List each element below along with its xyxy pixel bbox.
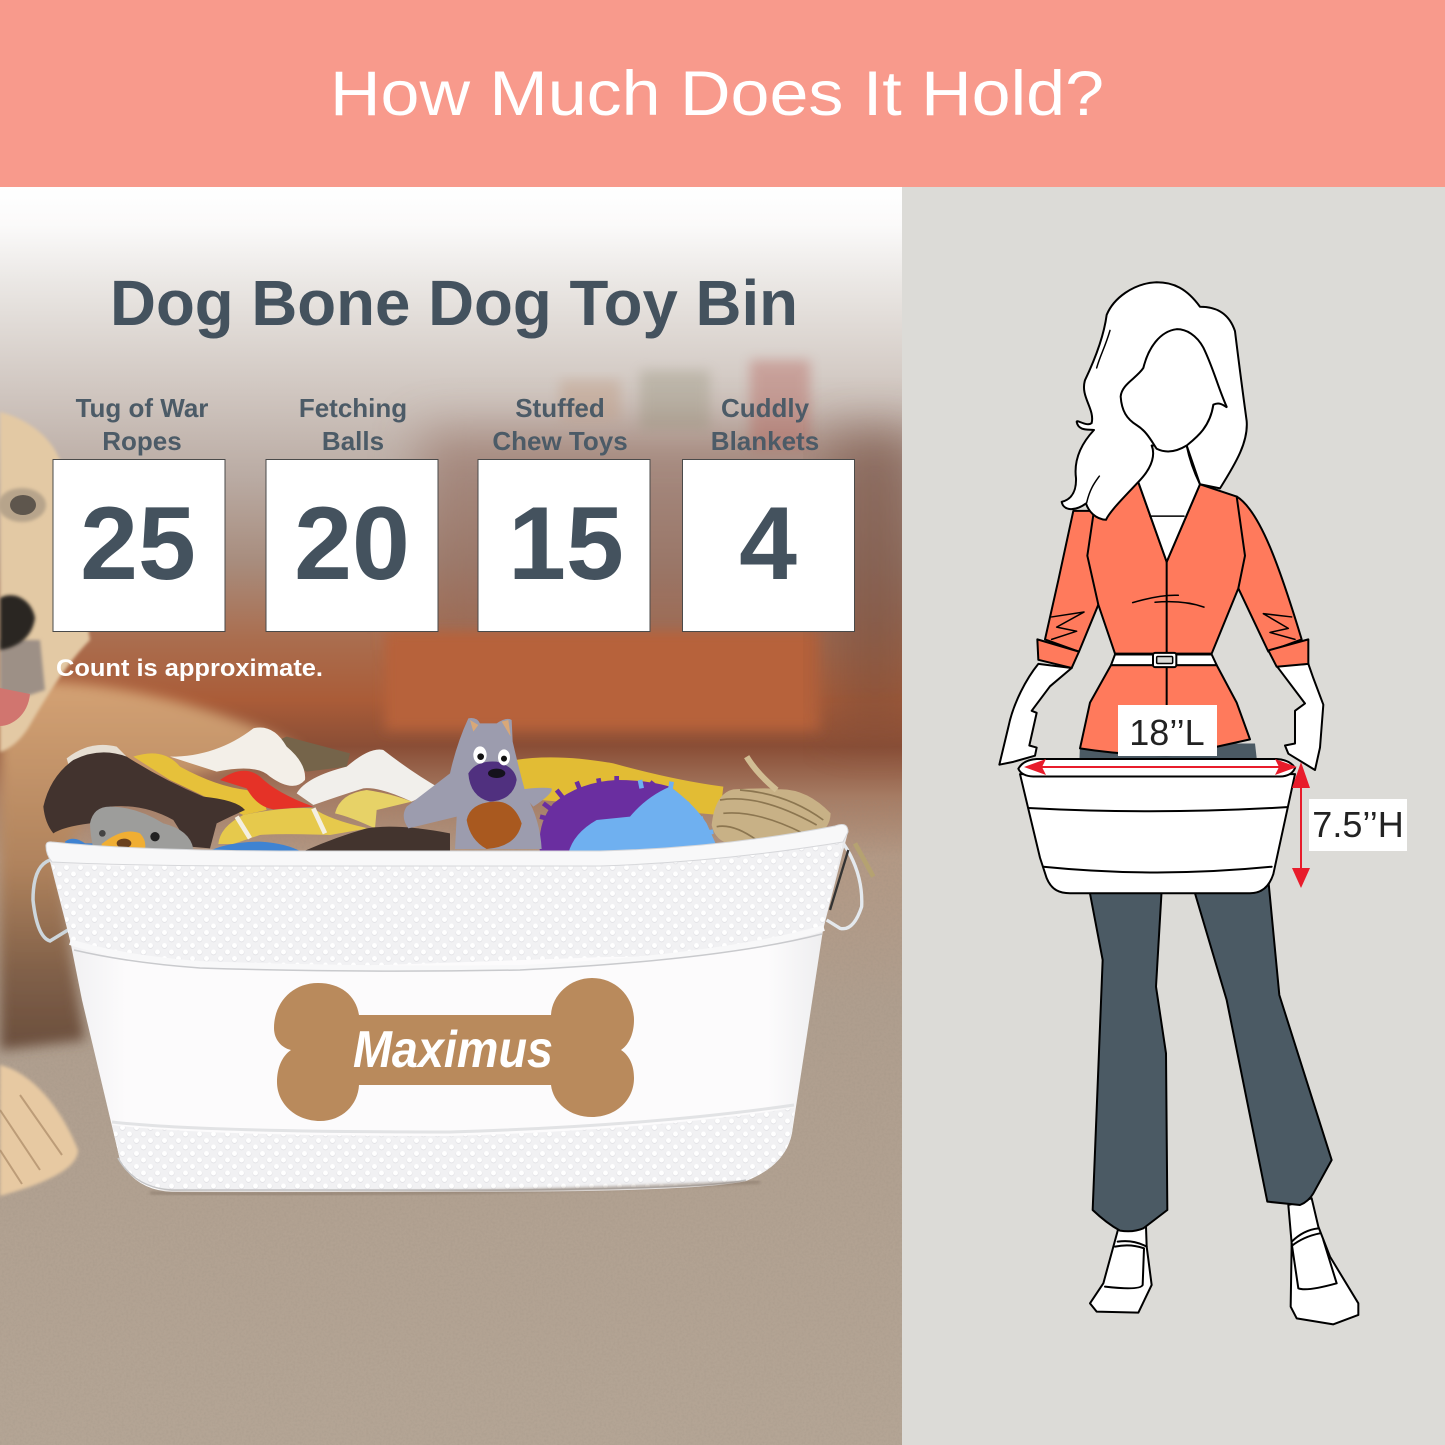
white cloth behind	[66, 744, 127, 764]
ribs	[70, 928, 824, 968]
left leg	[1089, 890, 1167, 1231]
left shoe	[1090, 1227, 1152, 1313]
brown plush 2	[305, 827, 450, 851]
right forearm and hand	[1277, 664, 1323, 770]
left handle	[33, 860, 68, 941]
label: Ropes	[102, 426, 182, 456]
right cuff	[1268, 639, 1308, 667]
arrow: length	[1024, 759, 1297, 775]
yellow toy	[515, 757, 723, 815]
hammered lower band	[112, 1108, 794, 1190]
grey bird plush	[90, 807, 193, 849]
upper body	[999, 282, 1323, 893]
squirrel plush	[404, 718, 552, 849]
left sleeve	[1045, 511, 1098, 652]
stat: cuddly blankets	[682, 393, 854, 632]
right handle bracket	[830, 850, 848, 910]
shirt placket	[1166, 562, 1168, 707]
toys	[43, 718, 873, 929]
shirt wrinkles	[1052, 595, 1295, 639]
value: 20	[294, 486, 410, 602]
value box	[266, 460, 438, 632]
right panel background	[902, 187, 1445, 1445]
label: Fetching	[299, 393, 407, 423]
label: Cuddly	[721, 393, 810, 423]
panel: woman holding tub	[999, 282, 1407, 1324]
value box	[682, 460, 854, 632]
hammered upper band	[52, 842, 843, 968]
dog head	[0, 412, 90, 752]
belt	[1111, 654, 1217, 665]
face	[1121, 329, 1227, 452]
yellow blanket	[218, 808, 368, 844]
toys: left pile	[43, 727, 450, 852]
pants waist	[1079, 743, 1257, 764]
hair strands	[1087, 330, 1110, 503]
tub body	[1020, 774, 1295, 893]
peplum	[1080, 665, 1250, 755]
tub body	[46, 824, 848, 1192]
belt buckle	[1153, 653, 1176, 667]
label: Stuffed	[515, 393, 605, 423]
bone toy	[170, 727, 305, 786]
white tub	[46, 824, 848, 1192]
brown plush	[43, 752, 245, 848]
yellow band	[133, 753, 267, 815]
room background	[0, 187, 920, 1445]
rim	[46, 824, 848, 866]
dog nose	[0, 595, 35, 650]
dark fabric	[282, 736, 350, 772]
pale yellow cloth	[335, 790, 412, 828]
bone decal	[274, 978, 634, 1121]
value box	[53, 460, 225, 632]
header banner	[0, 0, 1445, 187]
dog eye	[0, 488, 46, 522]
label: Tug of War	[76, 393, 208, 423]
label: Blankets	[711, 426, 819, 456]
arrow: height	[1292, 762, 1310, 888]
label: length: 18’’L	[1129, 712, 1205, 753]
stat: fetching balls	[266, 393, 438, 632]
shirt	[1037, 482, 1308, 755]
stat: stuffed chew toys	[478, 393, 650, 632]
label: Balls	[322, 426, 384, 456]
red toy	[220, 771, 313, 809]
spiky ball	[539, 776, 720, 853]
title: How Much Does It Hold?	[330, 59, 1104, 129]
stat: tug of war ropes	[53, 393, 225, 632]
value: 25	[80, 486, 196, 602]
tub ribs	[1028, 807, 1287, 872]
white cloth right	[297, 750, 440, 805]
torso	[1087, 482, 1245, 654]
dog	[0, 412, 300, 1196]
right leg	[1194, 880, 1332, 1205]
dog head shading	[0, 640, 45, 705]
value: 4	[739, 486, 797, 602]
label: length	[1118, 705, 1217, 756]
dog paw	[0, 1065, 78, 1196]
tub rim	[1018, 759, 1295, 777]
hair	[1062, 282, 1247, 520]
left cuff	[1037, 639, 1079, 668]
pants and shoes	[1089, 880, 1358, 1324]
right handle	[827, 843, 862, 929]
footnote: Count is approximate.	[56, 655, 323, 682]
blue toys	[65, 838, 299, 850]
neck and undershirt	[1138, 446, 1200, 562]
dog body	[0, 680, 300, 1050]
toys: right pile	[404, 718, 873, 929]
value: 15	[508, 486, 624, 602]
rope tail	[855, 843, 873, 877]
right sleeve	[1237, 497, 1302, 652]
dog tongue	[0, 688, 30, 726]
right shoe	[1288, 1198, 1358, 1324]
rope toy	[712, 757, 831, 845]
product name heading: Dog Bone Dog Toy Bin	[110, 267, 798, 339]
floor shadow	[150, 1182, 760, 1194]
value box	[478, 460, 650, 632]
bone name: Maximus	[353, 1021, 553, 1079]
label: height: 7.5’’H	[1312, 804, 1404, 845]
left forearm and hand	[999, 664, 1072, 765]
panel: product photo	[0, 187, 920, 1445]
label: Chew Toys	[492, 426, 628, 456]
